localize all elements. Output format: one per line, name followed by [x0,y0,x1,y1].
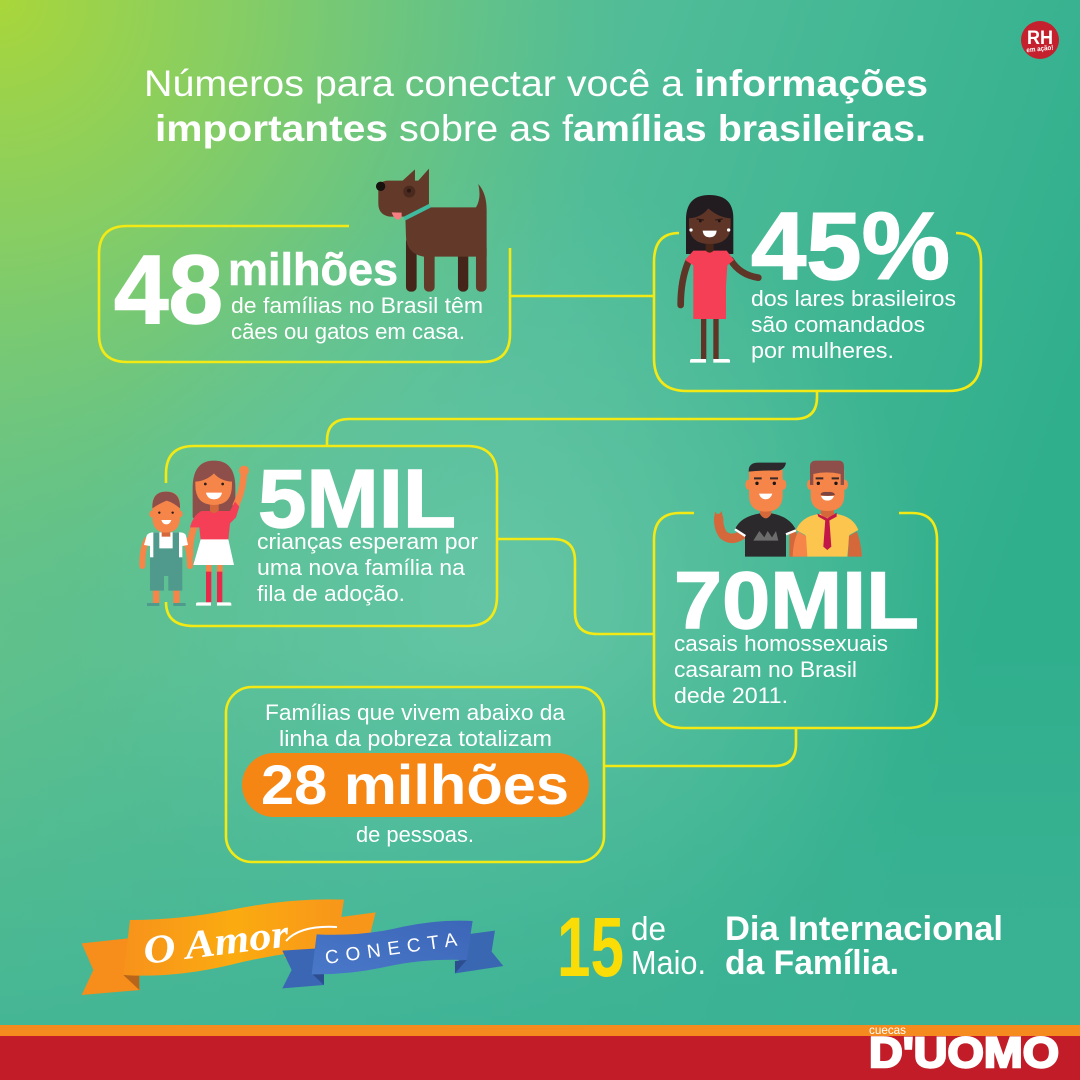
icon: couple [714,461,862,557]
panel: 28 milhões: linha da pobreza totalizam [279,726,552,751]
logo badge: RH em ação: RH [1027,28,1053,49]
panel: 5 mil: 5MIL [258,452,456,545]
panel: 45%: por mulheres. [751,338,894,363]
orange ribbon [82,899,376,995]
panel: 5 mil: fila de adoção. [257,581,405,606]
date: 15 de Maio: de [631,910,666,947]
panel: 5 mil: uma nova família na [257,555,466,580]
panel: 28 milhões [226,687,604,862]
ribbon: O Amor Conecta: O Amor [141,910,291,973]
title: amílias brasileiras. [573,108,926,149]
ribbon: O Amor Conecta: CONECTA [324,930,459,969]
icon: dog [376,169,487,292]
date: 15 de Maio [557,900,706,994]
footer band [0,1023,1080,1080]
panel: 45% [654,193,981,391]
title: informações [694,63,928,104]
blue ribbon [282,921,503,988]
ribbon: O Amor Conecta [82,899,503,995]
panel: 48 milhões: cães ou gatos em casa. [231,319,465,344]
panel: 45%: 45% [751,193,950,300]
date: 15 de Maio: Maio. [631,944,706,981]
panel: 70 mil: 70MIL [674,556,919,646]
panel: 48 milhões [99,169,510,362]
logo badge: RH em ação [1021,21,1059,59]
icon: children [142,461,249,606]
highlight pill [242,753,589,817]
date: 15 de Maio: 15 [557,900,624,994]
ribbon script swash [286,927,337,941]
panel: 45%: dos lares brasileiros [751,286,956,311]
panel: 5 mil [142,446,497,626]
logo badge: RH em ação: em ação! [1026,45,1054,54]
logo: Cuecas D'Uomo: D'UOMO [869,1029,1059,1077]
heading: Dia Internacional da Família [725,910,1003,982]
panel: 70 mil: casais homossexuais [674,631,888,656]
heading: Dia Internacional da Família: da Família. [725,944,899,982]
title: importantes [155,108,388,149]
panel: 70 mil: casaram no Brasil [674,657,857,682]
icon: woman [681,195,758,363]
panel: 5 mil: crianças esperam por [257,529,478,554]
panel: 28 milhões: Famílias que vivem abaixo da [265,700,566,725]
title: sobre as f [399,108,574,149]
connector lines between panels [327,296,817,766]
panel: 48 milhões: 48 [114,235,223,344]
logo: Cuecas D'Uomo: cuecas [869,1023,906,1037]
title: Números para conectar você a [144,63,683,104]
panel: 70 mil: dede 2011. [674,683,788,708]
panel: 28 milhões: de pessoas. [356,822,474,847]
panel: 70 mil [654,461,937,728]
heading: Dia Internacional da Família: Dia Internacional [725,910,1003,948]
panel: 48 milhões: milhões [228,244,398,295]
panel: 45%: são comandados [751,312,925,337]
panel: 48 milhões: de famílias no Brasil têm [231,293,483,318]
panel: 28 milhões: 28 milhões [261,753,569,816]
title [144,63,928,149]
